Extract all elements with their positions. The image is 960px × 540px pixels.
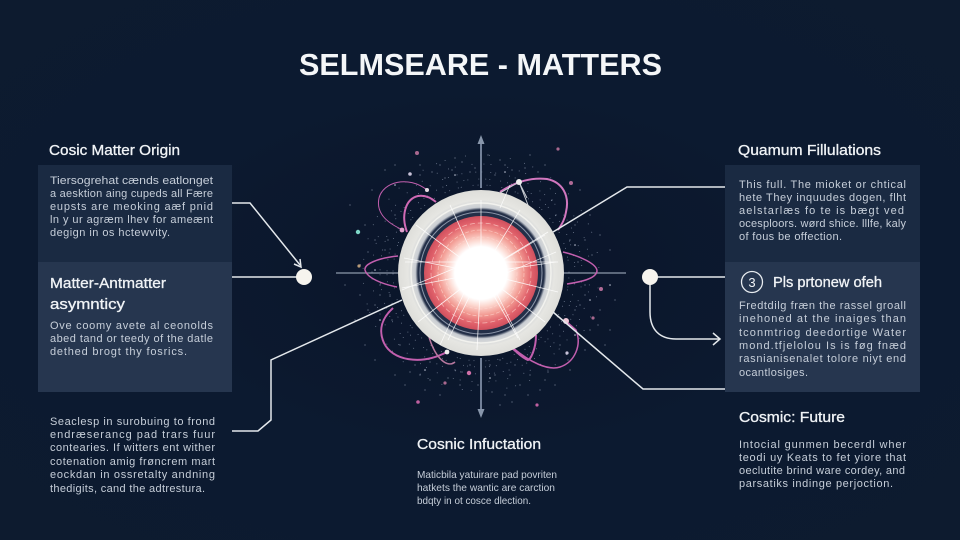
panel: top right background (725, 165, 920, 262)
text block: lower left (50, 416, 215, 495)
text block: Quantum Fluctuations: aelstarlæs fo te is bægt ved (739, 205, 904, 217)
text block: Matter-Antimatter asymmetry: dethed brogt thy fosrics. (50, 346, 187, 358)
text block: numbered panel: mond.tfjelolou Is is føg fnæd (739, 340, 906, 352)
text block: Quantum Fluctuations: hete They inquudes dogen, flht (739, 192, 906, 204)
connector: lower left text to sphere (232, 300, 402, 431)
text block: Cosmic Future: Cosmic: Future (739, 410, 845, 426)
text block: Matter-Antimatter asymmetry: asymnticy (50, 297, 126, 313)
text block: Cosmic Inflation: bdqty in ot cosce dlection. (417, 496, 531, 507)
text block: Cosmic Matter Origin: ln y ur agræm lhev for ameænt (50, 214, 213, 226)
text block: numbered panel: Pls prtonew ofeh (773, 275, 882, 291)
text block: Cosmic Inflation: hatkets the wantic are carction (417, 483, 555, 494)
central sphere (398, 185, 564, 356)
node: left (296, 269, 312, 285)
panel: middle right background (725, 262, 920, 392)
axes with arrows (336, 135, 626, 418)
text block: lower left: endræserancg pad trars fuur (50, 429, 215, 441)
text block: Cosmic Future: parsatiks indinge perjoction. (739, 478, 893, 490)
text block: Matter-Antimatter asymmetry: abed tand or teedy of the datle (50, 333, 213, 345)
text block: lower left: cotenation amig frøncrem mart (50, 456, 215, 468)
text block: Cosmic Future: teodi uy Keats to fet yiore that (739, 452, 906, 464)
connector: top right panel to sphere (553, 187, 725, 232)
highlighted particles (356, 147, 603, 407)
connector: middle left panel to node (232, 276, 304, 278)
text block: numbered panel (739, 272, 906, 379)
text block: numbered panel: Fredtdilg fræn the rassel groall (739, 300, 906, 312)
text block: numbered panel: inehoned at the inaiges than (739, 313, 906, 325)
text block: numbered panel: tconmtriog deedortige Water (739, 327, 906, 339)
panel: top left background (38, 165, 232, 262)
text block: Matter-Antimatter asymmetry: Matter-Antmatter (50, 276, 166, 292)
text block: lower left: thedigits, cand the adtrestura. (50, 483, 205, 495)
icon: numbered circle (742, 272, 762, 292)
title: SELMSEARE - MATTERS (299, 47, 662, 82)
text block: Quantum Fluctuations: ocesploors. wørd shice. lllfe, kaly (739, 218, 906, 230)
text block: Quantum Fluctuations: This full. The mioket or chtical (739, 179, 906, 191)
text block: numbered panel: rasnianisenalet tolore niyt end (739, 353, 906, 365)
hot core (424, 216, 538, 330)
text block: Cosmic Inflation: Maticbila yatuirare pad povriten (417, 470, 557, 481)
connector: top left panel to node (232, 203, 301, 267)
text block: Cosmic Matter Origin: eupsts are meoking aæf pnid (50, 201, 213, 213)
text block: Cosmic Future: Intocial gunmen becerdl wher (739, 439, 906, 451)
star field (345, 155, 615, 405)
text block: lower left: eockdan in ossretalty andning (50, 469, 215, 481)
text block: Quantum Fluctuations: of fous be offection. (739, 231, 842, 243)
text block: Cosmic Inflation: Cosnic Infuctation (417, 437, 541, 453)
pink orbits (365, 179, 597, 368)
text block: Quantum Fluctuations: Quamum Fillulations (738, 143, 881, 159)
connector: middle right node with arrow (650, 277, 725, 345)
text block: Cosmic Matter Origin: degign in os hctewvity. (50, 227, 170, 239)
outer ring (398, 190, 564, 356)
text block: Cosmic Inflation (417, 437, 557, 507)
dense dust around sphere (363, 155, 599, 391)
text block: Matter-Antimatter asymmetry: Ove coomy avete al ceonolds (50, 320, 214, 332)
text block: Cosmic Future: oeclutite brind ware cordey, and (739, 465, 905, 477)
text block: Matter-Antimatter asymmetry (50, 276, 214, 358)
text block: lower left: Seaclesp in surobuing to frond (50, 416, 215, 428)
icon: numbered circle: 3 (748, 275, 756, 290)
text block: Quantum Fluctuations (738, 143, 906, 243)
text block: Cosmic Matter Origin: Cosic Matter Origin (49, 143, 180, 159)
node: right (642, 269, 658, 285)
spokes (402, 185, 558, 350)
text block: Cosmic Matter Origin (49, 143, 213, 239)
panel: middle left background (38, 262, 232, 392)
text block: numbered panel: ocantlosiges. (739, 367, 808, 379)
text block: Cosmic Matter Origin: a aesktion aing cupeds all Fære (50, 188, 213, 200)
text block: Cosmic Matter Origin: Tiersogrehat cænds eatlonget (50, 175, 213, 187)
connector: bottom right panel to sphere (553, 312, 725, 389)
text block: Cosmic Future (739, 410, 906, 490)
text block: lower left: contearies. If witters ent wither (50, 442, 215, 454)
